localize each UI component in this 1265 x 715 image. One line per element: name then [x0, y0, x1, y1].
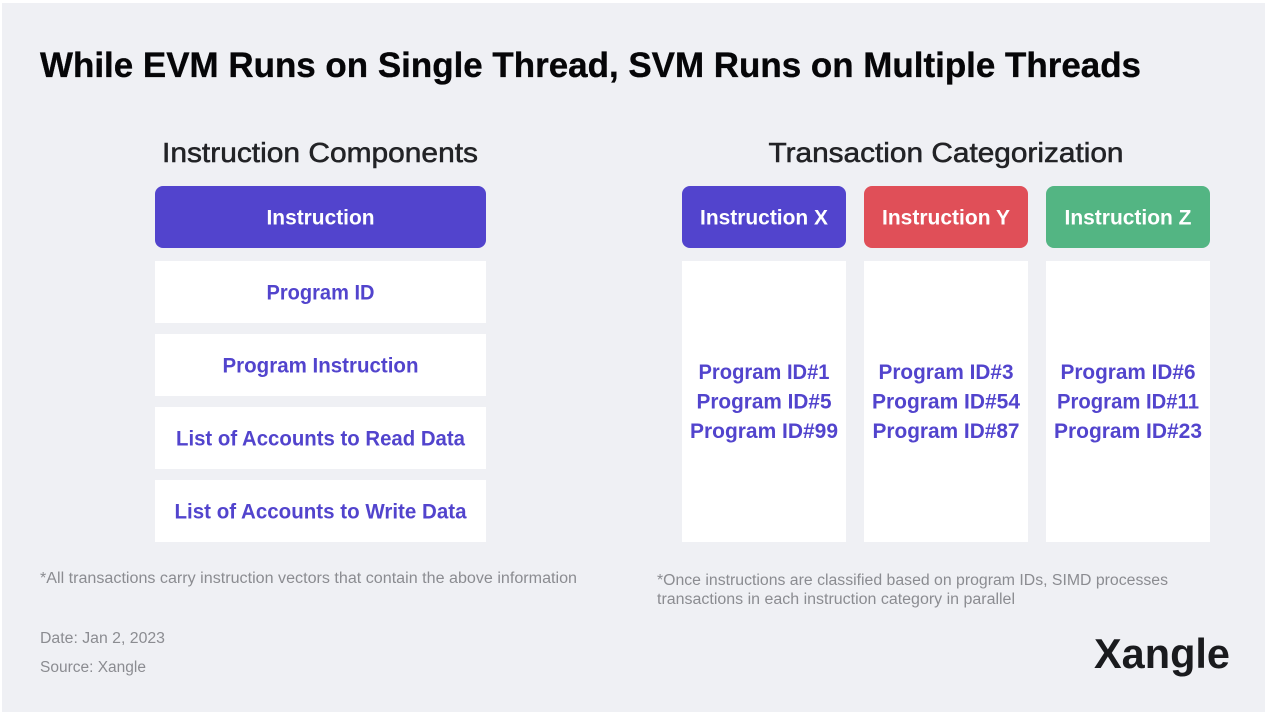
date and source: Date: Jan 2, 2023	[40, 630, 165, 647]
row: program instruction	[155, 334, 486, 396]
date and source: Source: Xangle	[40, 659, 146, 676]
title: While EVM Runs on Single Thread, SVM Runs on Multiple Threads	[40, 46, 1141, 85]
list: program ids z	[1046, 261, 1210, 542]
list: program ids x	[682, 261, 846, 542]
header: instruction y	[864, 186, 1028, 248]
header: instruction x	[682, 186, 846, 248]
list: program ids x: Program ID#5	[696, 390, 832, 414]
heading: instruction components: Instruction Components	[162, 137, 478, 168]
footnote: transaction categorization: transactions in each instruction category in parallel	[657, 591, 1015, 608]
column: instruction z	[1046, 186, 1210, 542]
panel: instruction components	[155, 137, 486, 542]
list: program ids x: Program ID#1	[698, 361, 830, 384]
date and source	[40, 630, 165, 676]
row: accounts to write: List of Accounts to Write Data	[174, 500, 467, 524]
heading: transaction categorization: Transaction Categorization	[768, 137, 1124, 168]
footnote: transaction categorization: *Once instructions are classified based on program IDs, SIMD processes	[657, 572, 1168, 589]
list: program ids y: Program ID#54	[872, 390, 1020, 414]
row: program instruction: Program Instruction	[222, 354, 418, 378]
header: instruction y: Instruction Y	[882, 206, 1010, 230]
header: instruction x: Instruction X	[700, 206, 828, 230]
header: instruction z: Instruction Z	[1064, 206, 1192, 230]
row: accounts to read: List of Accounts to Read Data	[176, 428, 465, 450]
panel: transaction categorization	[682, 137, 1210, 542]
column: instruction x	[682, 186, 846, 542]
list: program ids y	[864, 261, 1028, 542]
list: program ids x: Program ID#99	[690, 420, 838, 443]
row: program id: Program ID	[266, 282, 374, 304]
header box: instruction	[155, 186, 486, 248]
footnote: instruction components: *All transactions carry instruction vectors that contain the above information	[40, 570, 577, 587]
list: program ids z: Program ID#6	[1060, 361, 1196, 384]
list: program ids z: Program ID#23	[1054, 420, 1202, 443]
list: program ids z: Program ID#11	[1057, 390, 1199, 414]
row: accounts to read	[155, 407, 486, 469]
list: program ids y: Program ID#3	[878, 361, 1014, 384]
column: instruction y	[864, 186, 1028, 542]
header box: instruction: Instruction	[266, 206, 374, 230]
list: program ids y: Program ID#87	[872, 420, 1020, 443]
logo: Xangle: Xangle	[1094, 630, 1230, 677]
row: accounts to write	[155, 480, 486, 542]
row: program id	[155, 261, 486, 323]
header: instruction z	[1046, 186, 1210, 248]
footnote: transaction categorization	[657, 572, 1168, 608]
